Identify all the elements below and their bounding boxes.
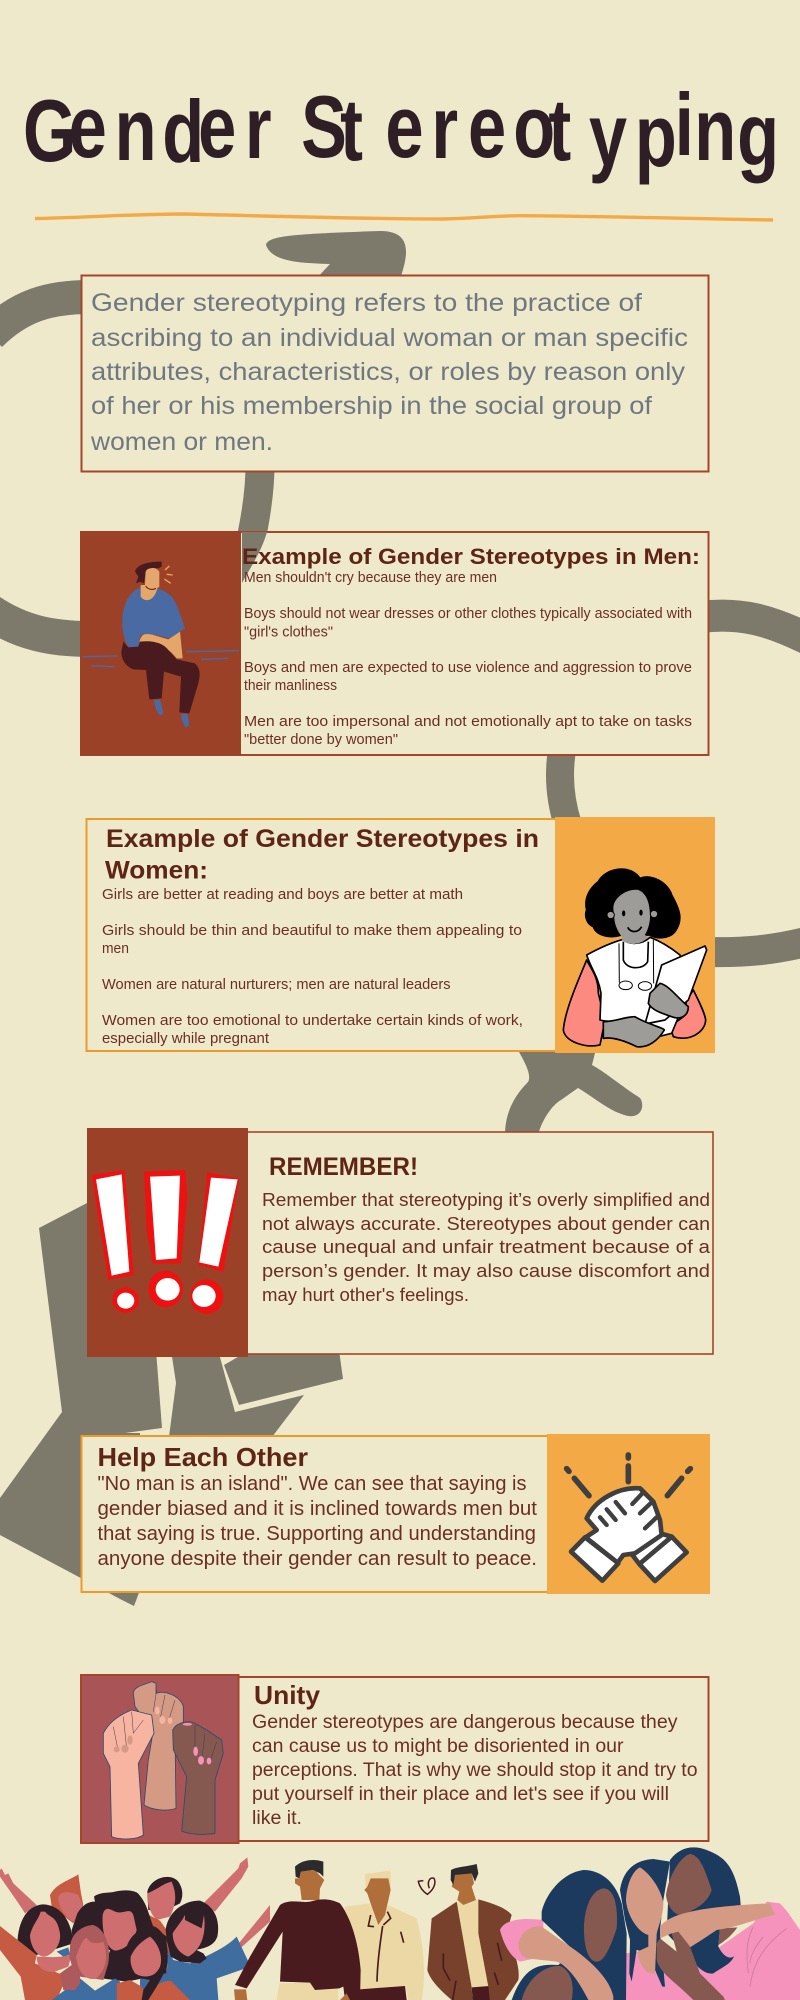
illustration: three men <box>234 1860 519 2000</box>
heading: men: Example of Gender Stereotypes in Men: <box>242 544 700 569</box>
title underline <box>35 214 773 220</box>
icon: clasped hands <box>567 1455 690 1581</box>
heading: women <box>105 825 539 884</box>
list: men stereotypes <box>244 570 692 748</box>
definition text: ascribing to an individual woman or man specific <box>91 324 688 352</box>
unity text: Gender stereotypes are dangerous because they <box>252 1712 678 1733</box>
icon: raised fists <box>103 1682 223 1839</box>
man in cream shirt <box>340 1871 424 2000</box>
definition text: of her or his membership in the social group of <box>91 392 652 420</box>
heading: unity: Unity <box>254 1680 321 1710</box>
grey band showing through <box>242 532 267 583</box>
title: Gender Stereotyping <box>23 76 779 185</box>
list: women stereotypes: Girls should be thin and beautiful to make them appealing to <box>102 923 522 939</box>
man in brown jacket <box>427 1864 519 2000</box>
illustration: women hugging <box>500 1847 800 2000</box>
help each other text <box>98 1473 537 1570</box>
unity text <box>252 1712 698 1829</box>
list: women stereotypes: Girls are better at reading and boys are better at math <box>102 887 463 903</box>
heading: women: Women: <box>105 856 208 884</box>
list: men stereotypes: Men shouldn't cry because they are men <box>244 570 497 586</box>
panel: remember <box>87 1128 713 1357</box>
remember text: cause unequal and unfair treatment because of a <box>262 1236 711 1257</box>
list: women stereotypes: especially while pregnant <box>102 1031 269 1047</box>
definition text: Gender stereotyping refers to the practice of <box>91 289 642 317</box>
list: men stereotypes: Men are too impersonal and not emotionally apt to take on tasks <box>244 714 692 730</box>
background grey squiggle and shard shapes <box>0 231 800 1606</box>
icon: woman holding book <box>563 869 707 1047</box>
help each other text: anyone despite their gender can result to peace. <box>98 1548 537 1570</box>
definition text <box>90 289 688 456</box>
panel: stereotypes in men <box>80 531 708 756</box>
list: women stereotypes: men <box>102 941 129 957</box>
help each other text: "No man is an island". We can see that saying is <box>98 1473 526 1495</box>
icon: seated man <box>83 562 238 728</box>
list: men stereotypes: Boys should not wear dresses or other clothes typically associated with <box>244 606 692 622</box>
unity text: can cause us to might be disoriented in our <box>252 1736 624 1757</box>
remember text: person’s gender. It may also cause discomfort and <box>262 1260 710 1281</box>
heading: help each other: Help Each Other <box>98 1442 308 1472</box>
icon: three exclamation marks <box>92 1170 239 1314</box>
help each other text: that saying is true. Supporting and understanding <box>98 1523 536 1545</box>
list: men stereotypes: "girl's clothes" <box>244 624 333 640</box>
remember text <box>262 1189 711 1305</box>
illustration: group of women cheering <box>0 1857 270 2000</box>
man in dark sweater <box>234 1860 361 2000</box>
list: men stereotypes: "better done by women" <box>244 732 398 748</box>
help each other text: gender biased and it is inclined towards men but <box>98 1498 537 1520</box>
unity text: like it. <box>252 1808 302 1829</box>
list: men stereotypes: Boys and men are expected to use violence and aggression to prove <box>244 660 692 676</box>
list: men stereotypes: their manliness <box>244 678 337 694</box>
panel: definition <box>82 276 708 472</box>
remember text: Remember that stereotyping it’s overly simplified and <box>262 1189 710 1210</box>
unity text: put yourself in their place and let's see if you will <box>252 1784 669 1805</box>
list: women stereotypes: Women are natural nurturers; men are natural leaders <box>102 977 450 993</box>
panel: stereotypes in women <box>86 817 715 1053</box>
heading: remember: REMEMBER! <box>269 1153 418 1181</box>
panel: help each other <box>82 1434 710 1594</box>
icon: small heart <box>418 1878 435 1894</box>
heading: women: Example of Gender Stereotypes in <box>106 825 539 853</box>
unity text: perceptions. That is why we should stop it and try to <box>252 1760 698 1781</box>
list: women stereotypes <box>102 887 523 1047</box>
panel: unity <box>81 1675 708 1843</box>
remember text: not always accurate. Stereotypes about gender can <box>262 1213 710 1234</box>
list: women stereotypes: Women are too emotional to undertake certain kinds of work, <box>102 1013 523 1029</box>
remember text: may hurt other's feelings. <box>262 1284 469 1305</box>
definition text: attributes, characteristics, or roles by reason only <box>91 358 686 386</box>
definition text: women or men. <box>90 428 273 456</box>
